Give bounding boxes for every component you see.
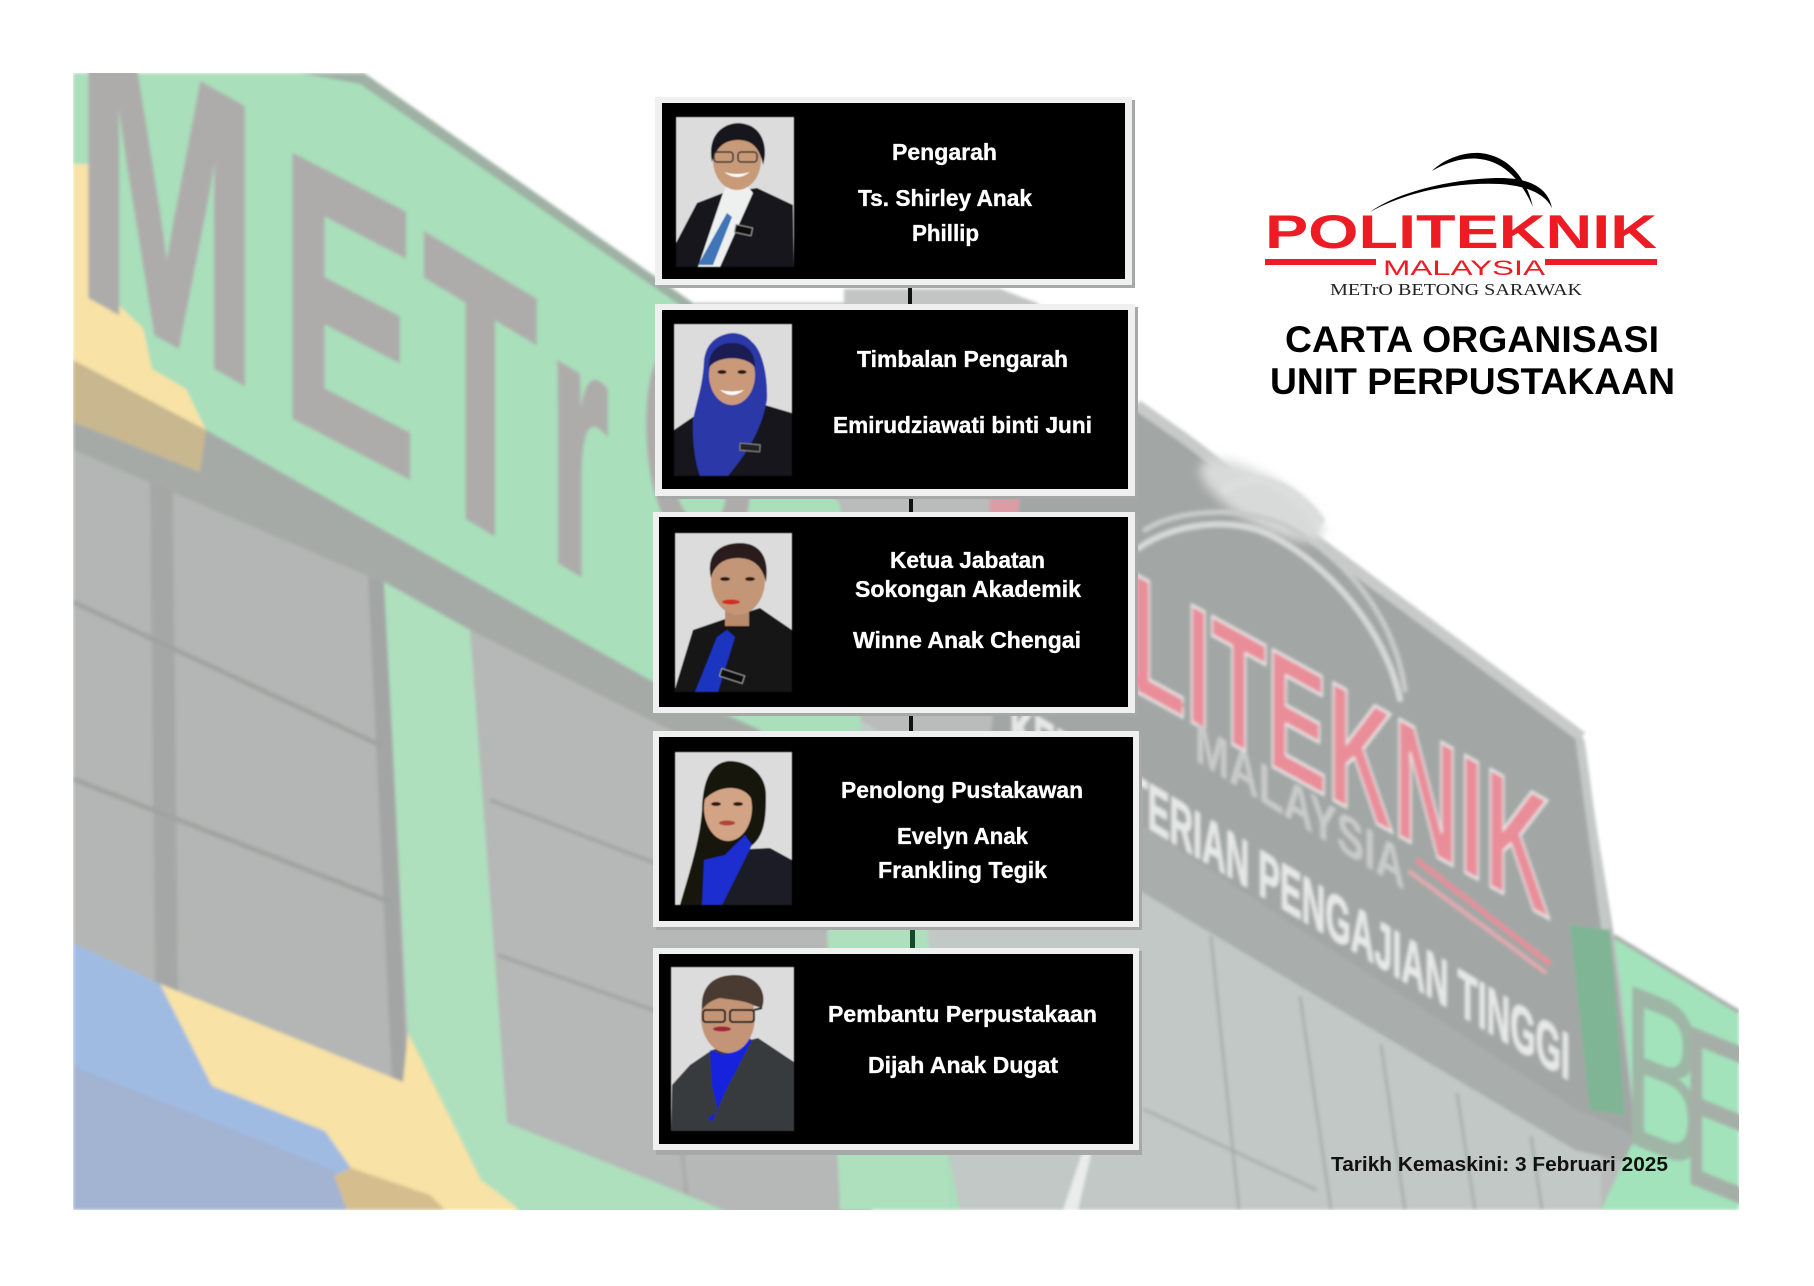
panel: Ketua Jabatan <box>653 512 1138 716</box>
connector line 4 <box>910 927 915 949</box>
update date note: Tarikh Kemaskini: 3 Februari 2025 <box>1331 1154 1668 1176</box>
background: faded building photo: T <box>423 153 538 640</box>
portrait: Emirudziawati <box>674 324 792 476</box>
name text: Pengarah: Pengarah <box>892 139 997 165</box>
title: CARTA ORGANISASI <box>1285 319 1659 360</box>
background: faded building photo: OL <box>985 532 1105 732</box>
name text: Ketua Jabatan <box>853 547 1081 653</box>
background: faded building photo: O <box>640 255 757 648</box>
connector line 3 <box>909 713 913 732</box>
name text: Penolong Pustakawan: Frankling Tegik <box>878 857 1047 883</box>
name text: Pengarah: Ts. Shirley Anak <box>858 185 1032 211</box>
logo: Politeknik Malaysia <box>1265 153 1657 299</box>
background: faded building photo: E <box>280 66 417 562</box>
background: faded building photo: r <box>548 216 609 672</box>
name text: Pembantu Perpustakaan: Dijah Anak Dugat <box>868 1052 1058 1078</box>
panel: Pengarah <box>655 97 1135 288</box>
name text: Pembantu Perpustakaan: Pembantu Perpustakaan <box>828 1001 1097 1027</box>
name text: Ketua Jabatan: Winne Anak Chengai <box>853 627 1081 653</box>
logo: Politeknik Malaysia: POLITEKNIK <box>1265 205 1657 258</box>
panel: Penolong Pustakawan <box>653 731 1142 930</box>
portrait: Dijah <box>671 967 794 1131</box>
background: faded building photo: MALAYSIA <box>1195 710 1405 902</box>
panel: Pembantu Perpustakaan <box>653 948 1142 1155</box>
name text: Timbalan Pengarah: Timbalan Pengarah <box>857 346 1068 372</box>
portrait: Shirley <box>676 117 794 267</box>
portrait: Winne <box>674 533 792 692</box>
name text: Ketua Jabatan: Ketua Jabatan <box>890 547 1045 573</box>
name text: Timbalan Pengarah <box>833 346 1092 438</box>
title <box>1270 319 1675 402</box>
panel: Timbalan Pengarah <box>655 304 1138 499</box>
name text: Penolong Pustakawan: Evelyn Anak <box>897 823 1028 849</box>
background: faded building photo: B <box>1622 933 1706 1224</box>
background: faded building photo: E <box>1680 973 1764 1264</box>
connector line 1 <box>908 285 912 305</box>
name text: Pembantu Perpustakaan <box>828 1001 1097 1078</box>
icon: logo swoosh <box>1370 153 1552 212</box>
logo: Politeknik Malaysia: MALAYSIA <box>1383 257 1545 280</box>
name text: Timbalan Pengarah: Emirudziawati binti Juni <box>833 412 1092 438</box>
name text: Penolong Pustakawan: Penolong Pustakawan <box>841 777 1083 803</box>
logo: Politeknik Malaysia: METrO BETONG SARAWAK <box>1330 280 1583 299</box>
title: UNIT PERPUSTAKAAN <box>1270 361 1675 402</box>
name text: Pengarah <box>858 139 1032 246</box>
connector line 2 <box>909 496 913 513</box>
portrait: Evelyn <box>675 752 792 905</box>
name text: Penolong Pustakawan <box>841 777 1083 883</box>
name text: Pengarah: Phillip <box>912 220 979 246</box>
name text: Ketua Jabatan: Sokongan Akademik <box>855 576 1081 602</box>
